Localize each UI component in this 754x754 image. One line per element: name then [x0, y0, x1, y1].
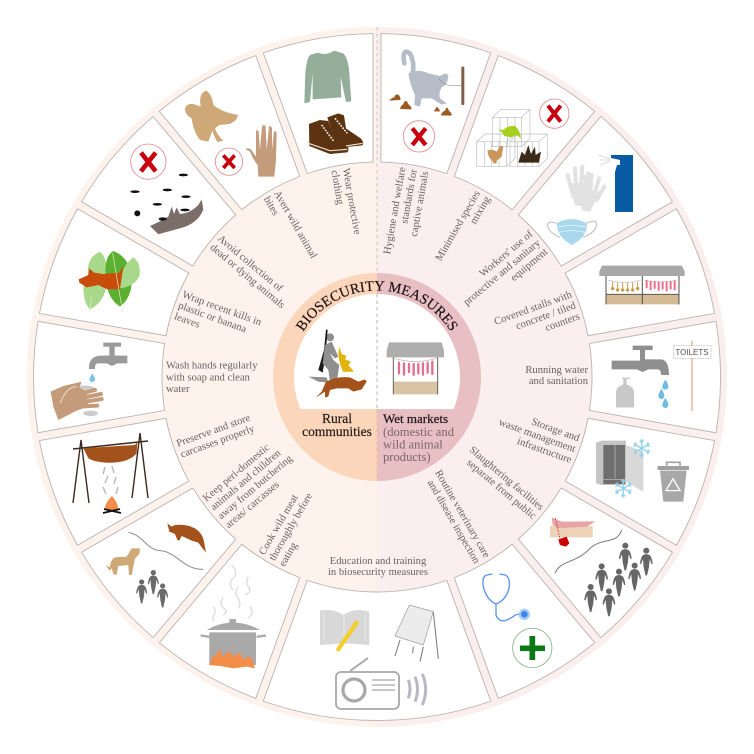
- text: wrap recent kills: plastic or banana: [177, 300, 248, 335]
- centre circle: [273, 273, 481, 481]
- icon: covered stalls: [599, 266, 685, 304]
- text: covered stalls: Covered stalls with: [493, 289, 574, 328]
- text: keep peri-domestic animals: Keep peri-domestic: [201, 442, 272, 504]
- label: wet markets: Wet markets: [383, 411, 448, 426]
- text: workers' equipment: equipment: [509, 247, 550, 284]
- text: avert wild animal bites: Avert wild animal: [271, 189, 319, 261]
- icon: hand washing under tap: [51, 343, 127, 420]
- text: cook wild meat: eating: [277, 540, 300, 569]
- icon: meat and crowd: [550, 517, 653, 616]
- labels: wet market measures: [382, 166, 589, 566]
- text: keep peri-domestic animals: areas/ carcasses: [224, 479, 282, 531]
- text: covered stalls: counters: [544, 311, 581, 334]
- icon: tap, soap and toilets sign: [612, 341, 692, 411]
- text: avert wild animal bites: bites: [261, 195, 281, 218]
- text: keep peri-domestic animals: away from butchering: [216, 453, 295, 522]
- icon: carcass smoked over fire: [73, 433, 148, 513]
- text: wash hands: Wash hands regularly: [166, 361, 258, 372]
- text: workers' equipment: protective and sanitary: [462, 237, 543, 308]
- icon: book and pencil: [320, 610, 369, 649]
- icon: spray bottle: [598, 155, 633, 212]
- text: veterinary care: Routine veterinary care: [432, 468, 492, 560]
- icon: shirt and boots: [304, 51, 363, 154]
- icon: flipchart: [395, 605, 438, 662]
- text: running water: and sanitation: [529, 376, 589, 387]
- text: hygiene and welfare: standards for: [399, 168, 420, 224]
- icon: kill wrapped in leaves: [79, 251, 140, 313]
- icon: stethoscope and green cross: [483, 574, 552, 668]
- text: minimised species mixing: mixing: [468, 194, 493, 226]
- text: storage and waste: waste management: [497, 417, 577, 455]
- labels: rural measures: [166, 167, 362, 569]
- text: wrap recent kills: leaves: [173, 311, 201, 331]
- icon: market stall: [387, 342, 444, 394]
- text: wash hands: with soap and clean: [166, 372, 251, 383]
- icon: hunter with animal: [308, 329, 367, 398]
- text: education and training: in biosecurity measures: [328, 567, 428, 578]
- text: preserve carcasses: carcasses properly: [179, 423, 257, 461]
- sign: toilets: TOILETS: [675, 348, 709, 357]
- icon: stacked animal cages: [477, 99, 569, 167]
- text: veterinary care: and disease inspection: [425, 478, 482, 566]
- label: wet markets: (domestic and: [383, 425, 455, 439]
- text: avoid collection: dead or dying animals: [208, 242, 287, 311]
- text: cook wild meat: Cook wild meat: [257, 493, 301, 557]
- text: storage and waste: infrastructure: [516, 436, 573, 466]
- text: wrap recent kills: Wrap recent kills in: [181, 290, 263, 329]
- icon: flies on carcass with cross: [130, 144, 203, 234]
- icon: animal, dog, people boundary: [106, 523, 206, 607]
- text: hygiene and welfare: Hygiene and welfare: [382, 166, 408, 255]
- icon: radio: [336, 658, 426, 709]
- icon: tethered animal in poor conditions: [389, 52, 464, 152]
- text: wear protective clothing: clothing: [328, 169, 345, 206]
- icon: gloves and mask: [548, 167, 604, 245]
- text: preserve carcasses: Preserve and store: [175, 413, 252, 450]
- title: curved heading: BIOSECURITY MEASURES: [296, 280, 458, 332]
- text: wash hands: water: [166, 384, 190, 395]
- sign: toilets: [673, 346, 711, 358]
- text: education and training: Education and training: [330, 556, 427, 567]
- icon: cooking pot on flames: [201, 565, 266, 668]
- label: rural communities: Rural: [322, 411, 352, 426]
- text: wear protective clothing: Wear protective: [340, 167, 362, 236]
- text: slaughtering facilities: separate from public: [464, 457, 538, 522]
- text: running water: Running water: [525, 365, 588, 376]
- text: avoid collection: Avoid collection of: [215, 233, 285, 295]
- text: covered stalls: concrete / tiled: [515, 300, 578, 332]
- text: hygiene and welfare: captive animals: [409, 170, 431, 237]
- text: storage and waste: Storage and: [530, 417, 582, 444]
- label: wet markets: products): [383, 450, 431, 464]
- icon: bear and hand with cross: [185, 91, 277, 177]
- text: minimised species mixing: Minimised species: [434, 189, 483, 263]
- centre dashed divider: [376, 27, 378, 273]
- text: workers' equipment: Workers' use of: [478, 229, 536, 280]
- label: wet markets: wild animal: [383, 438, 443, 452]
- text: slaughtering facilities: Slaughtering facilities: [467, 445, 545, 513]
- icon: fridge and waste bin: [596, 439, 689, 502]
- text: keep peri-domestic animals: animals and children: [209, 447, 284, 513]
- label: rural communities: communities: [302, 424, 372, 439]
- text: cook wild meat: thoroughly before: [267, 491, 315, 563]
